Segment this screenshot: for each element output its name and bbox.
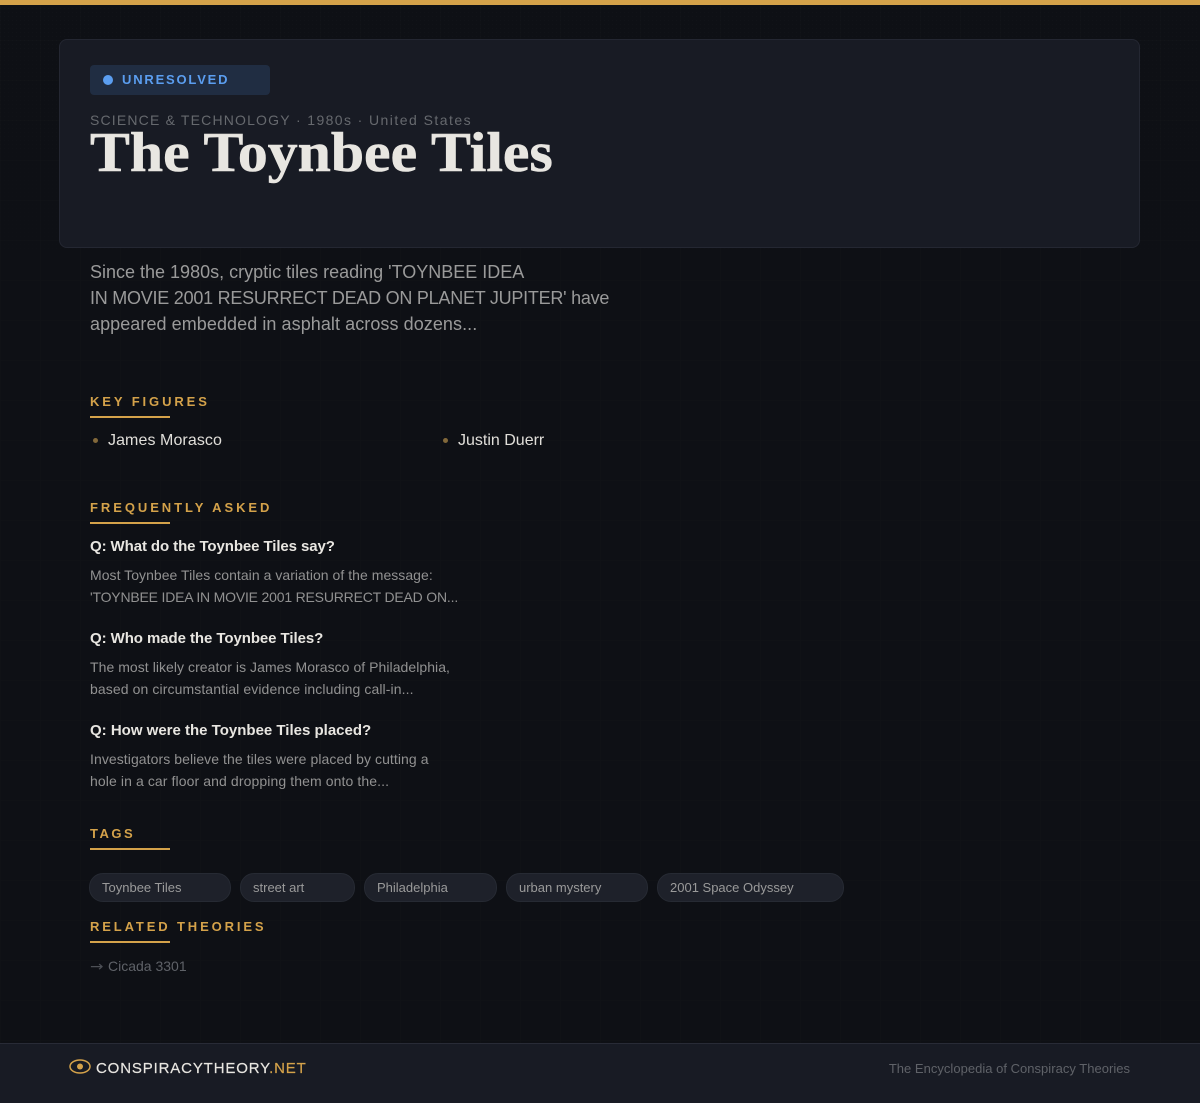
answer 2: The most likely creator is James Morasco of Philadelphia, (90, 659, 450, 675)
category line: SCIENCE & TECHNOLOGY · 1980s · United States (90, 112, 472, 128)
title: The Toynbee Tiles (90, 122, 553, 184)
answer 1: 'TOYNBEE IDEA IN MOVIE 2001 RESURRECT DEAD ON... (90, 589, 458, 605)
figure: James Morasco: James Morasco (108, 432, 222, 449)
summary text: appeared embedded in asphalt across dozens... (90, 314, 477, 334)
summary text (90, 262, 609, 334)
badge label: UNRESOLVED (122, 72, 229, 87)
panel: header (59, 39, 1140, 248)
question 3: Q: How were the Toynbee Tiles placed? (90, 722, 371, 739)
section: related theories: RELATED THEORIES (90, 919, 266, 934)
summary text: Since the 1980s, cryptic tiles reading 'TOYNBEE IDEA (90, 262, 524, 282)
tag: street art (253, 880, 304, 895)
answer 3: Investigators believe the tiles were placed by cutting a (90, 751, 429, 767)
brand name: CONSPIRACYTHEORY.NET (96, 1060, 307, 1077)
answer 1 (90, 567, 458, 605)
summary text: IN MOVIE 2001 RESURRECT DEAD ON PLANET JUPITER' have (90, 288, 609, 308)
figure: Justin Duerr: Justin Duerr (458, 432, 544, 449)
icon: status dot (103, 75, 113, 85)
answer 2 (90, 659, 450, 697)
tag: 2001 Space Odyssey (670, 880, 794, 895)
footer (0, 1043, 1200, 1103)
icon: eye logo (69, 1059, 91, 1074)
answer 1: Most Toynbee Tiles contain a variation of the message: (90, 567, 433, 583)
tag (657, 873, 844, 902)
answer 2: based on circumstantial evidence including call-in... (90, 681, 414, 697)
tag: urban mystery (519, 880, 601, 895)
section: tags: TAGS (90, 826, 135, 841)
tag (240, 873, 355, 902)
tag (506, 873, 648, 902)
related link: Cicada 3301 (108, 958, 187, 974)
question 1: Q: What do the Toynbee Tiles say? (90, 538, 335, 555)
answer 3 (90, 751, 429, 789)
status badge (90, 65, 270, 95)
answer 3: hole in a car floor and dropping them onto the... (90, 773, 389, 789)
tag: Philadelphia (377, 880, 448, 895)
related link: → (90, 959, 103, 975)
section: frequently asked: FREQUENTLY ASKED (90, 500, 272, 515)
tag (364, 873, 497, 902)
tag: Toynbee Tiles (102, 880, 182, 895)
tag (89, 873, 231, 902)
footer tagline: The Encyclopedia of Conspiracy Theories (889, 1061, 1130, 1076)
section: key figures: KEY FIGURES (90, 394, 210, 409)
question 2: Q: Who made the Toynbee Tiles? (90, 630, 323, 647)
